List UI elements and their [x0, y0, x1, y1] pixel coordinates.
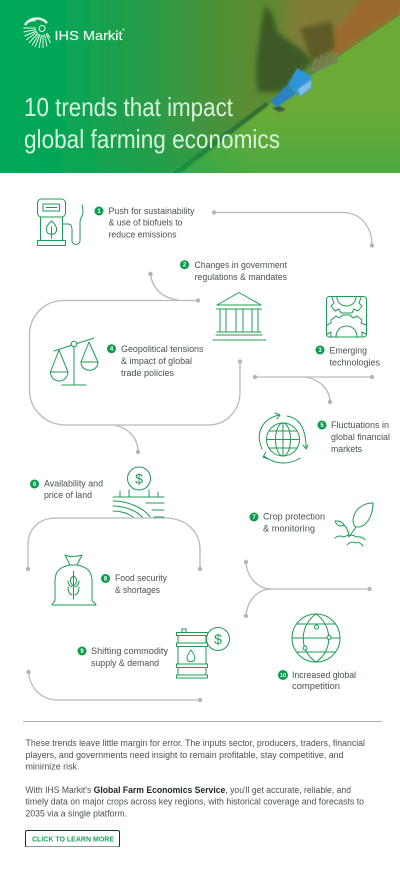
label 4: & impact of global: [121, 356, 192, 366]
label 3: technologies: [330, 358, 380, 368]
badge 10: 10: [280, 673, 286, 679]
badge 3: 3: [318, 348, 322, 354]
icon: gears panel: [326, 296, 366, 337]
text block: margin for error: players, and governments need insight to remain profitable, stay competitive, and: [26, 750, 344, 760]
label 8: Food security: [115, 573, 167, 583]
logo: [24, 19, 125, 48]
badge 4: 4: [110, 347, 114, 353]
item 4: [107, 344, 204, 378]
label 8: [115, 573, 167, 595]
label 7: & monitoring: [263, 524, 315, 534]
badge 8: 8: [104, 576, 108, 582]
item 3: [316, 346, 380, 368]
icon: balance scales: [50, 338, 98, 385]
badge 2: 2: [183, 263, 187, 269]
icon: seedling: [335, 503, 373, 546]
label 1: [108, 206, 195, 240]
label 2: [194, 260, 287, 282]
label 5: [331, 420, 390, 454]
icon: globe with pins: [292, 614, 340, 662]
text block: service description: 2035 via a single platform.: [26, 808, 127, 818]
item 7: [250, 512, 325, 534]
text block: service description: timely data on major crops across key regions, with historical coverage and forecasts to: [26, 796, 364, 806]
label 10: [292, 670, 356, 691]
label 2: regulations & mandates: [194, 272, 287, 282]
icon: fuel pump with leaf: [38, 199, 83, 246]
photo: tractor: [270, 68, 312, 112]
label 3: [330, 346, 380, 368]
label 5: markets: [331, 444, 362, 454]
item 9: [78, 646, 169, 668]
label 9: Shifting commodity: [91, 646, 169, 656]
logo: ®: [122, 27, 125, 32]
item 5: [318, 420, 390, 454]
item 8: [101, 573, 167, 595]
connector lines: [26, 210, 374, 702]
text block: service description: [26, 785, 364, 818]
text block: margin for error: [26, 738, 365, 772]
icon: grain sack: [52, 555, 96, 605]
label 3: Emerging: [330, 346, 367, 356]
logo text: IHS Markit: [54, 28, 123, 43]
badge 6: 6: [33, 482, 37, 488]
label 4: [121, 344, 204, 378]
item 1: [94, 206, 195, 240]
label 10: competition: [292, 681, 340, 691]
badge 9: 9: [80, 649, 84, 655]
logo mark: [24, 19, 50, 48]
title: 10 trends that impact: [24, 92, 234, 122]
label 1: & use of biofuels to: [108, 218, 182, 228]
label 6: [44, 478, 103, 500]
button: click to learn more: [26, 830, 120, 847]
item 6: [30, 478, 103, 500]
icon: land with dollar: $: [135, 470, 143, 486]
label 1: reduce emissions: [108, 230, 177, 240]
label 4: trade policies: [121, 368, 174, 378]
badge 5: 5: [320, 423, 324, 429]
label 6: price of land: [44, 490, 92, 500]
photo: plough tines: [312, 53, 338, 72]
text block: margin for error: minimize risk.: [26, 762, 80, 772]
label 9: supply & demand: [91, 658, 159, 668]
label 8: & shortages: [115, 585, 160, 595]
badge 7: 7: [252, 515, 256, 521]
label 5: Fluctuations in: [331, 420, 389, 430]
button: click to learn more: CLICK TO LEARN MORE: [32, 834, 114, 844]
label 2: Changes in government: [194, 260, 287, 270]
label 10: Increased global: [292, 670, 356, 680]
header banner: [0, 0, 400, 175]
icon: oil barrel with dollar: $: [214, 631, 222, 647]
icon: land with dollar: [113, 467, 164, 517]
title: [24, 92, 280, 154]
label 6: Availability and: [44, 478, 103, 488]
text block: margin for error: These trends leave little margin for error. The inputs sector, producers, traders, financial: [26, 738, 365, 748]
icon: oil barrel with dollar: [176, 628, 230, 678]
icon: government building: [213, 292, 266, 340]
label 9: [91, 646, 169, 668]
icon: globe with arrows: [259, 413, 308, 463]
item 10: [278, 670, 356, 691]
title: global farming economics: [24, 124, 280, 154]
label 7: [263, 512, 325, 534]
photo: field: [0, 0, 400, 175]
label 4: Geopolitical tensions: [121, 344, 204, 354]
label 1: Push for sustainability: [108, 206, 195, 216]
label 7: Crop protection: [263, 512, 325, 522]
text block: service description: With IHS Markit's Global Farm Economics Service, you'll get accurate, reliable, and: [26, 785, 351, 795]
label 5: global financial: [331, 432, 390, 442]
badge 1: 1: [97, 209, 101, 215]
item 2: [180, 260, 287, 282]
